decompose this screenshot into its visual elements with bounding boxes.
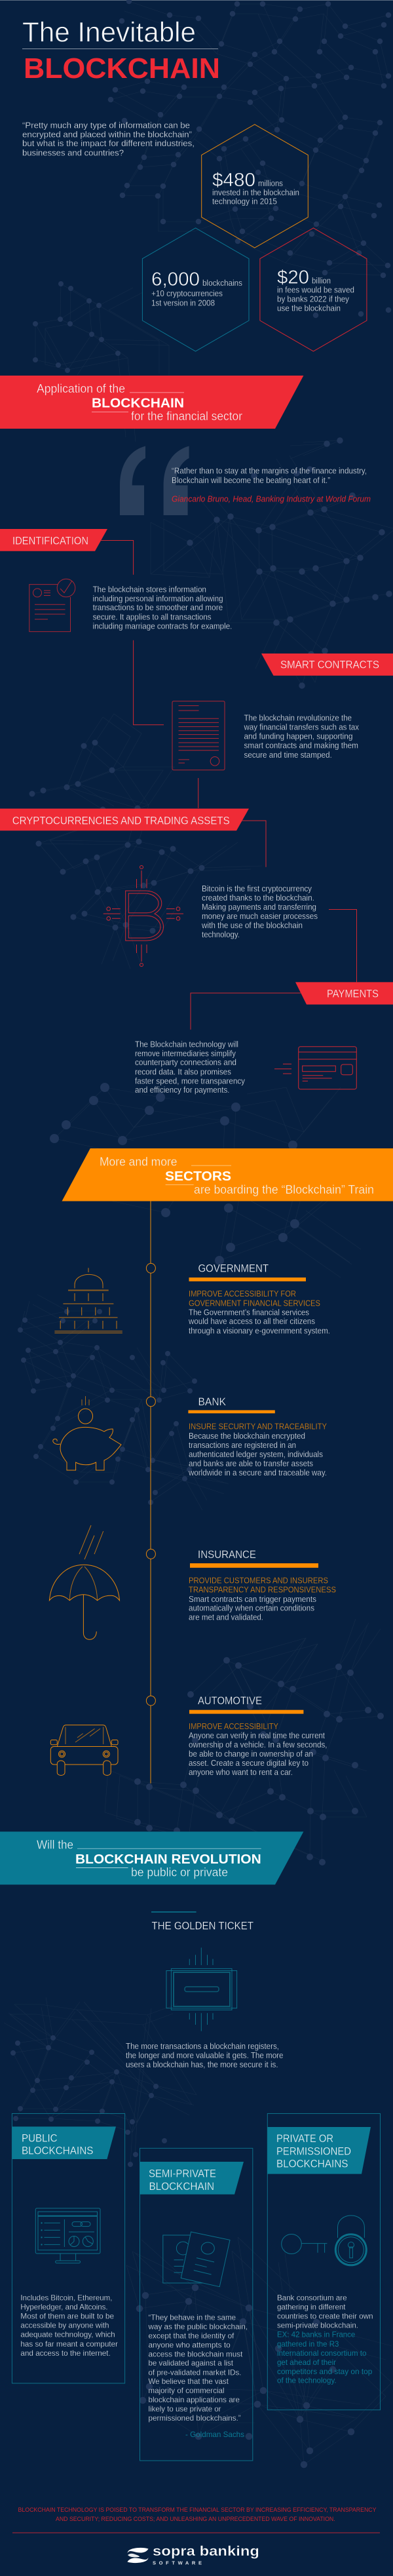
sector: bank: authenticated ledger system, individuals <box>189 1450 323 1459</box>
smart contracts text: and funding happen, supporting <box>244 732 352 741</box>
sector: government: GOVERNMENT <box>198 1262 269 1275</box>
stat hexagon: 6,000 blockchains: +10 cryptocurrencies <box>151 289 223 298</box>
icon: piggy bank <box>53 1396 121 1470</box>
sector: insurance: TRANSPARENCY AND RESPONSIVENESS <box>189 1586 336 1595</box>
intro quote text: businesses and countries? <box>22 149 124 158</box>
banner: smart contracts <box>261 654 393 676</box>
sector: insurance: automatically when certain conditions <box>189 1604 314 1613</box>
sector: automotive: AUTOMOTIVE <box>198 1694 262 1707</box>
connector: crypto to bitcoin text <box>242 821 266 867</box>
heading: the golden ticket: THE GOLDEN TICKET <box>152 1919 253 1932</box>
sector: bank <box>188 1395 328 1477</box>
banner: payments: PAYMENTS <box>327 987 379 1000</box>
timeline with markers <box>146 1201 155 1784</box>
smart contracts text: secure and time stamped. <box>244 751 332 760</box>
banner: application of the blockchain: for the financial sector <box>131 409 242 423</box>
sector: bank: BANK <box>198 1395 227 1408</box>
stat hexagon: 480 millions: $480 <box>212 170 255 191</box>
public blockchains text: Most of them are built to be <box>20 2311 114 2320</box>
stat hexagon: 20 billion: by banks 2022 if they <box>277 295 350 304</box>
stat hexagon: 480 millions: technology in 2015 <box>212 197 277 206</box>
banner: application of the blockchain <box>0 376 303 429</box>
banner: blockchain revolution: BLOCKCHAIN REVOLUTION <box>75 1852 261 1867</box>
footer statement: BLOCKCHAIN TECHNOLOGY IS POISED TO TRANSFORM THE FINANCIAL SECTOR BY INCREASING EFFICIENCY, TRANSPARENCY <box>18 2507 376 2513</box>
smart contracts text: way financial transfers such as tax <box>244 723 360 732</box>
sector: automotive: anyone who want to rent a car. <box>189 1768 293 1777</box>
stat hexagon: 20 billion: use the blockchain <box>277 304 341 313</box>
semi-private quote text: except that the identity of <box>148 2331 234 2340</box>
title <box>22 17 220 85</box>
sector: automotive: asset. Create a secure digital key to <box>189 1759 309 1768</box>
connector: payments to text <box>191 993 301 1030</box>
payments text: record data. It also promises <box>135 1068 231 1077</box>
private blockchains example: of the technology. <box>277 2376 337 2385</box>
title: The Inevitable <box>22 17 196 49</box>
bitcoin text: created thanks to the blockchain. <box>202 893 314 903</box>
panel: private or permissioned blockchains: PERMISSIONED <box>276 2145 351 2158</box>
icon: government building <box>54 1268 122 1333</box>
semi-private quote text: - Goldman Sachs <box>185 2430 244 2439</box>
public blockchains text: accessible by anyone with <box>20 2321 109 2330</box>
sector: bank: transactions are registered in an <box>189 1441 296 1450</box>
private blockchains text: gathering in different <box>277 2302 346 2311</box>
payments text: The Blockchain technology will <box>135 1040 238 1049</box>
identification text <box>93 585 232 631</box>
banner: smart contracts: SMART CONTRACTS <box>280 658 379 671</box>
banner: more and more sectors: are boarding the “Blockchain” Train <box>194 1182 374 1196</box>
intro quote text <box>22 121 195 158</box>
footer statement: AND SECURITY; REDUCING COSTS; AND UNLEASHING AN UNPRECEDENTED WAVE OF INNOVATION. <box>56 2516 335 2522</box>
semi-private quote text <box>148 2313 248 2439</box>
banner: more and more sectors: SECTORS <box>165 1169 231 1184</box>
golden ticket text: users a blockchain has, the more secure it is. <box>126 2060 278 2069</box>
payments text: counterparty connections and <box>135 1058 236 1067</box>
sector: automotive: Anyone can verify in real time the current <box>189 1731 325 1740</box>
semi-private quote text: likely to use private or <box>148 2404 221 2413</box>
banner: more and more sectors: More and more <box>100 1154 177 1168</box>
stat hexagon: 6,000 blockchains <box>142 228 249 351</box>
private blockchains text: semi-private blockchain. <box>277 2321 358 2330</box>
bitcoin text: with the use of the blockchain <box>201 921 303 930</box>
semi-private quote text: “They behave in the same <box>148 2313 236 2322</box>
panel: semi-private blockchain <box>140 2148 253 2461</box>
payments text: faster speed, more transparency <box>135 1076 246 1085</box>
semi-private quote text: of pre-validated market IDs. <box>148 2368 241 2377</box>
payments text: remove intermediaries simplify <box>135 1049 236 1058</box>
icon: contract document <box>172 701 225 770</box>
expert quote: “Rather than to stay at the margins of the finance industry, <box>172 467 367 476</box>
banner: blockchain revolution: Will the <box>37 1838 73 1851</box>
sector: insurance <box>189 1548 336 1622</box>
expert quote: Giancarlo Bruno, Head, Banking Industry at World Forum <box>172 495 371 504</box>
bitcoin text: money are much easier processes <box>202 912 318 921</box>
stat hexagon: 6,000 blockchains: 6,000 <box>151 269 200 290</box>
sector: insurance: are met and validated. <box>189 1613 263 1622</box>
stat hexagon: 20 billion <box>260 228 367 351</box>
semi-private quote text: anyone who attempts to <box>148 2340 231 2349</box>
title: BLOCKCHAIN <box>24 52 220 85</box>
sector: insurance: INSURANCE <box>198 1548 256 1561</box>
intro quote text: encrypted and placed within the blockchain” <box>22 130 192 139</box>
private blockchains text <box>277 2293 373 2330</box>
stat hexagon: 6,000 blockchains: 1st version in 2008 <box>151 298 215 307</box>
public blockchains text: adequate technology, which <box>20 2330 115 2339</box>
icon: two documents <box>163 2232 230 2287</box>
sector: insurance: PROVIDE CUSTOMERS AND INSURERS <box>189 1576 328 1585</box>
banner: cryptocurrencies and trading assets <box>0 809 249 830</box>
private blockchains example: international consortium to <box>277 2349 367 2358</box>
sector: government: GOVERNMENT FINANCIAL SERVICES <box>189 1298 320 1308</box>
banner: cryptocurrencies and trading assets: CRYPTOCURRENCIES AND TRADING ASSETS <box>12 814 230 827</box>
logo: sopra banking software <box>127 2544 259 2566</box>
sector: automotive: IMPROVE ACCESSIBILITY <box>189 1722 279 1731</box>
stat hexagon: 20 billion: in fees would be saved <box>277 285 354 294</box>
golden ticket text: The more transactions a blockchain registers, <box>126 2042 279 2051</box>
payments text <box>135 1040 246 1095</box>
identification text: transactions to be smoother and more <box>93 603 223 612</box>
icon: monitor <box>35 2208 100 2263</box>
connector: bitcoin to payments <box>329 910 356 982</box>
smart contracts text <box>244 714 360 760</box>
intro quote text: “Pretty much any type of information can be <box>22 121 190 130</box>
bitcoin text: technology. <box>202 930 240 939</box>
footer statement <box>18 2507 376 2522</box>
semi-private quote text: access the blockchain must <box>148 2350 243 2359</box>
semi-private quote text: blockchain applications are <box>148 2395 240 2404</box>
banner: more and more sectors <box>62 1148 393 1201</box>
public blockchains text: has so far meant a computer <box>20 2339 118 2349</box>
identification text: secure. It applies to all transactions <box>93 612 212 621</box>
private blockchains example: gathered in the R3 <box>277 2339 339 2349</box>
panel: private or permissioned blockchains <box>267 2113 380 2410</box>
icon: large quotation marks <box>120 446 189 515</box>
sector: automotive: be able to change in ownership of an <box>189 1749 313 1759</box>
icon: golden ticket chip <box>166 1947 237 2031</box>
identification text: including marriage contracts for example. <box>93 621 232 631</box>
panel: private or permissioned blockchains: BLOCKCHAINS <box>276 2158 348 2170</box>
panel: semi-private blockchain: BLOCKCHAIN <box>149 2180 214 2193</box>
private blockchains example: EX: 42 banks in France <box>277 2330 356 2339</box>
sector: bank: worldwide in a secure and traceable way. <box>188 1468 327 1477</box>
smart contracts text: smart contracts and making them <box>244 741 358 751</box>
private blockchains example <box>277 2330 373 2385</box>
banner: blockchain revolution <box>0 1831 303 1884</box>
banner: application of the blockchain: BLOCKCHAIN <box>92 395 184 410</box>
icon: bitcoin chip <box>103 865 183 966</box>
payments text: and efficiency for payments. <box>135 1085 229 1095</box>
stat hexagon: 20 billion: billion <box>312 277 331 286</box>
private blockchains text: Bank consortium are <box>277 2293 347 2302</box>
stat hexagon: 480 millions <box>202 125 308 248</box>
panel: public blockchains <box>12 2113 125 2383</box>
intro quote text: but what is the impact for different industries, <box>22 139 195 148</box>
bitcoin text: Making payments and transferring <box>202 903 316 912</box>
private blockchains example: get ahead of their <box>277 2358 336 2367</box>
expert quote: Blockchain will become the beating heart of it.” <box>172 476 330 485</box>
banner: payments <box>295 982 393 1004</box>
panel: private or permissioned blockchains: PRIVATE OR <box>276 2132 333 2145</box>
sector: government <box>188 1262 330 1335</box>
smart contracts text: The blockchain revolutionize the <box>244 714 352 723</box>
bitcoin text <box>201 884 318 939</box>
banner: blockchain revolution: be public or private <box>131 1865 228 1879</box>
private blockchains example: competitors and stay on top <box>277 2367 373 2376</box>
banner: application of the blockchain: Application of the <box>37 381 125 395</box>
sector: bank: INSURE SECURITY AND TRACEABILITY <box>189 1422 328 1432</box>
sector: government: would have access to all their citizens <box>188 1317 315 1326</box>
connector: contract to cryptocurrencies <box>198 778 199 808</box>
bitcoin text: Bitcoin is the first cryptocurrency <box>202 884 312 893</box>
semi-private quote text: permissioned blockchains.” <box>148 2413 241 2423</box>
golden ticket text <box>126 2042 284 2069</box>
sector: government: IMPROVE ACCESSIBILITY FOR <box>189 1289 296 1298</box>
connector: identification to contracts <box>100 540 164 725</box>
stat hexagon: 480 millions: millions <box>258 179 283 188</box>
icon: car <box>50 1725 118 1775</box>
panel: public blockchains: PUBLIC <box>22 2132 58 2144</box>
public blockchains text: Includes Bitcoin, Ethereum, <box>20 2293 112 2302</box>
icon: umbrella <box>49 1525 119 1639</box>
private blockchains text: countries to create their own <box>277 2311 373 2320</box>
public blockchains text: Hyperledger, and Altcoins. <box>20 2302 108 2311</box>
sector: government: The Government’s financial services <box>189 1308 309 1317</box>
semi-private quote text: We believe that the vast <box>148 2377 229 2386</box>
golden ticket text: the longer and more valuable it gets. The more <box>126 2051 284 2060</box>
public blockchains text <box>20 2293 118 2358</box>
sector: government: through a visionary e-government system. <box>189 1326 330 1335</box>
sector: automotive <box>189 1694 328 1777</box>
stat hexagon: 480 millions: invested in the blockchain <box>212 188 299 197</box>
logo: sopra banking software: SOFTWARE <box>153 2560 202 2566</box>
public blockchains text: and access to the internet. <box>20 2349 111 2358</box>
semi-private quote text: majority of commercial <box>148 2386 224 2395</box>
semi-private quote text: way as the public blockchain, <box>148 2322 248 2331</box>
logo: sopra banking software: sopra banking <box>153 2544 259 2559</box>
icon: credit card <box>274 1047 356 1089</box>
icon: key and padlock <box>282 2215 366 2265</box>
icon: identity document <box>29 579 75 632</box>
banner: identification <box>0 529 107 551</box>
sector: automotive: ownership of a vehicle. In a few seconds, <box>189 1740 328 1749</box>
banner: identification: IDENTIFICATION <box>12 534 88 547</box>
stat hexagon: 20 billion: $20 <box>277 267 309 288</box>
sector: bank: Because the blockchain encrypted <box>189 1432 305 1441</box>
identification text: The blockchain stores information <box>93 585 206 594</box>
sector: bank: and banks are able to transfer assets <box>189 1459 313 1468</box>
stat hexagon: 6,000 blockchains: blockchains <box>202 279 242 288</box>
identification text: including personal information allowing <box>93 594 223 603</box>
panel: public blockchains: BLOCKCHAINS <box>22 2145 93 2157</box>
expert quote <box>172 467 371 504</box>
semi-private quote text: be validated against a list <box>148 2358 234 2368</box>
sector: insurance: Smart contracts can trigger payments <box>189 1595 316 1604</box>
panel: semi-private blockchain: SEMI-PRIVATE <box>149 2167 216 2179</box>
